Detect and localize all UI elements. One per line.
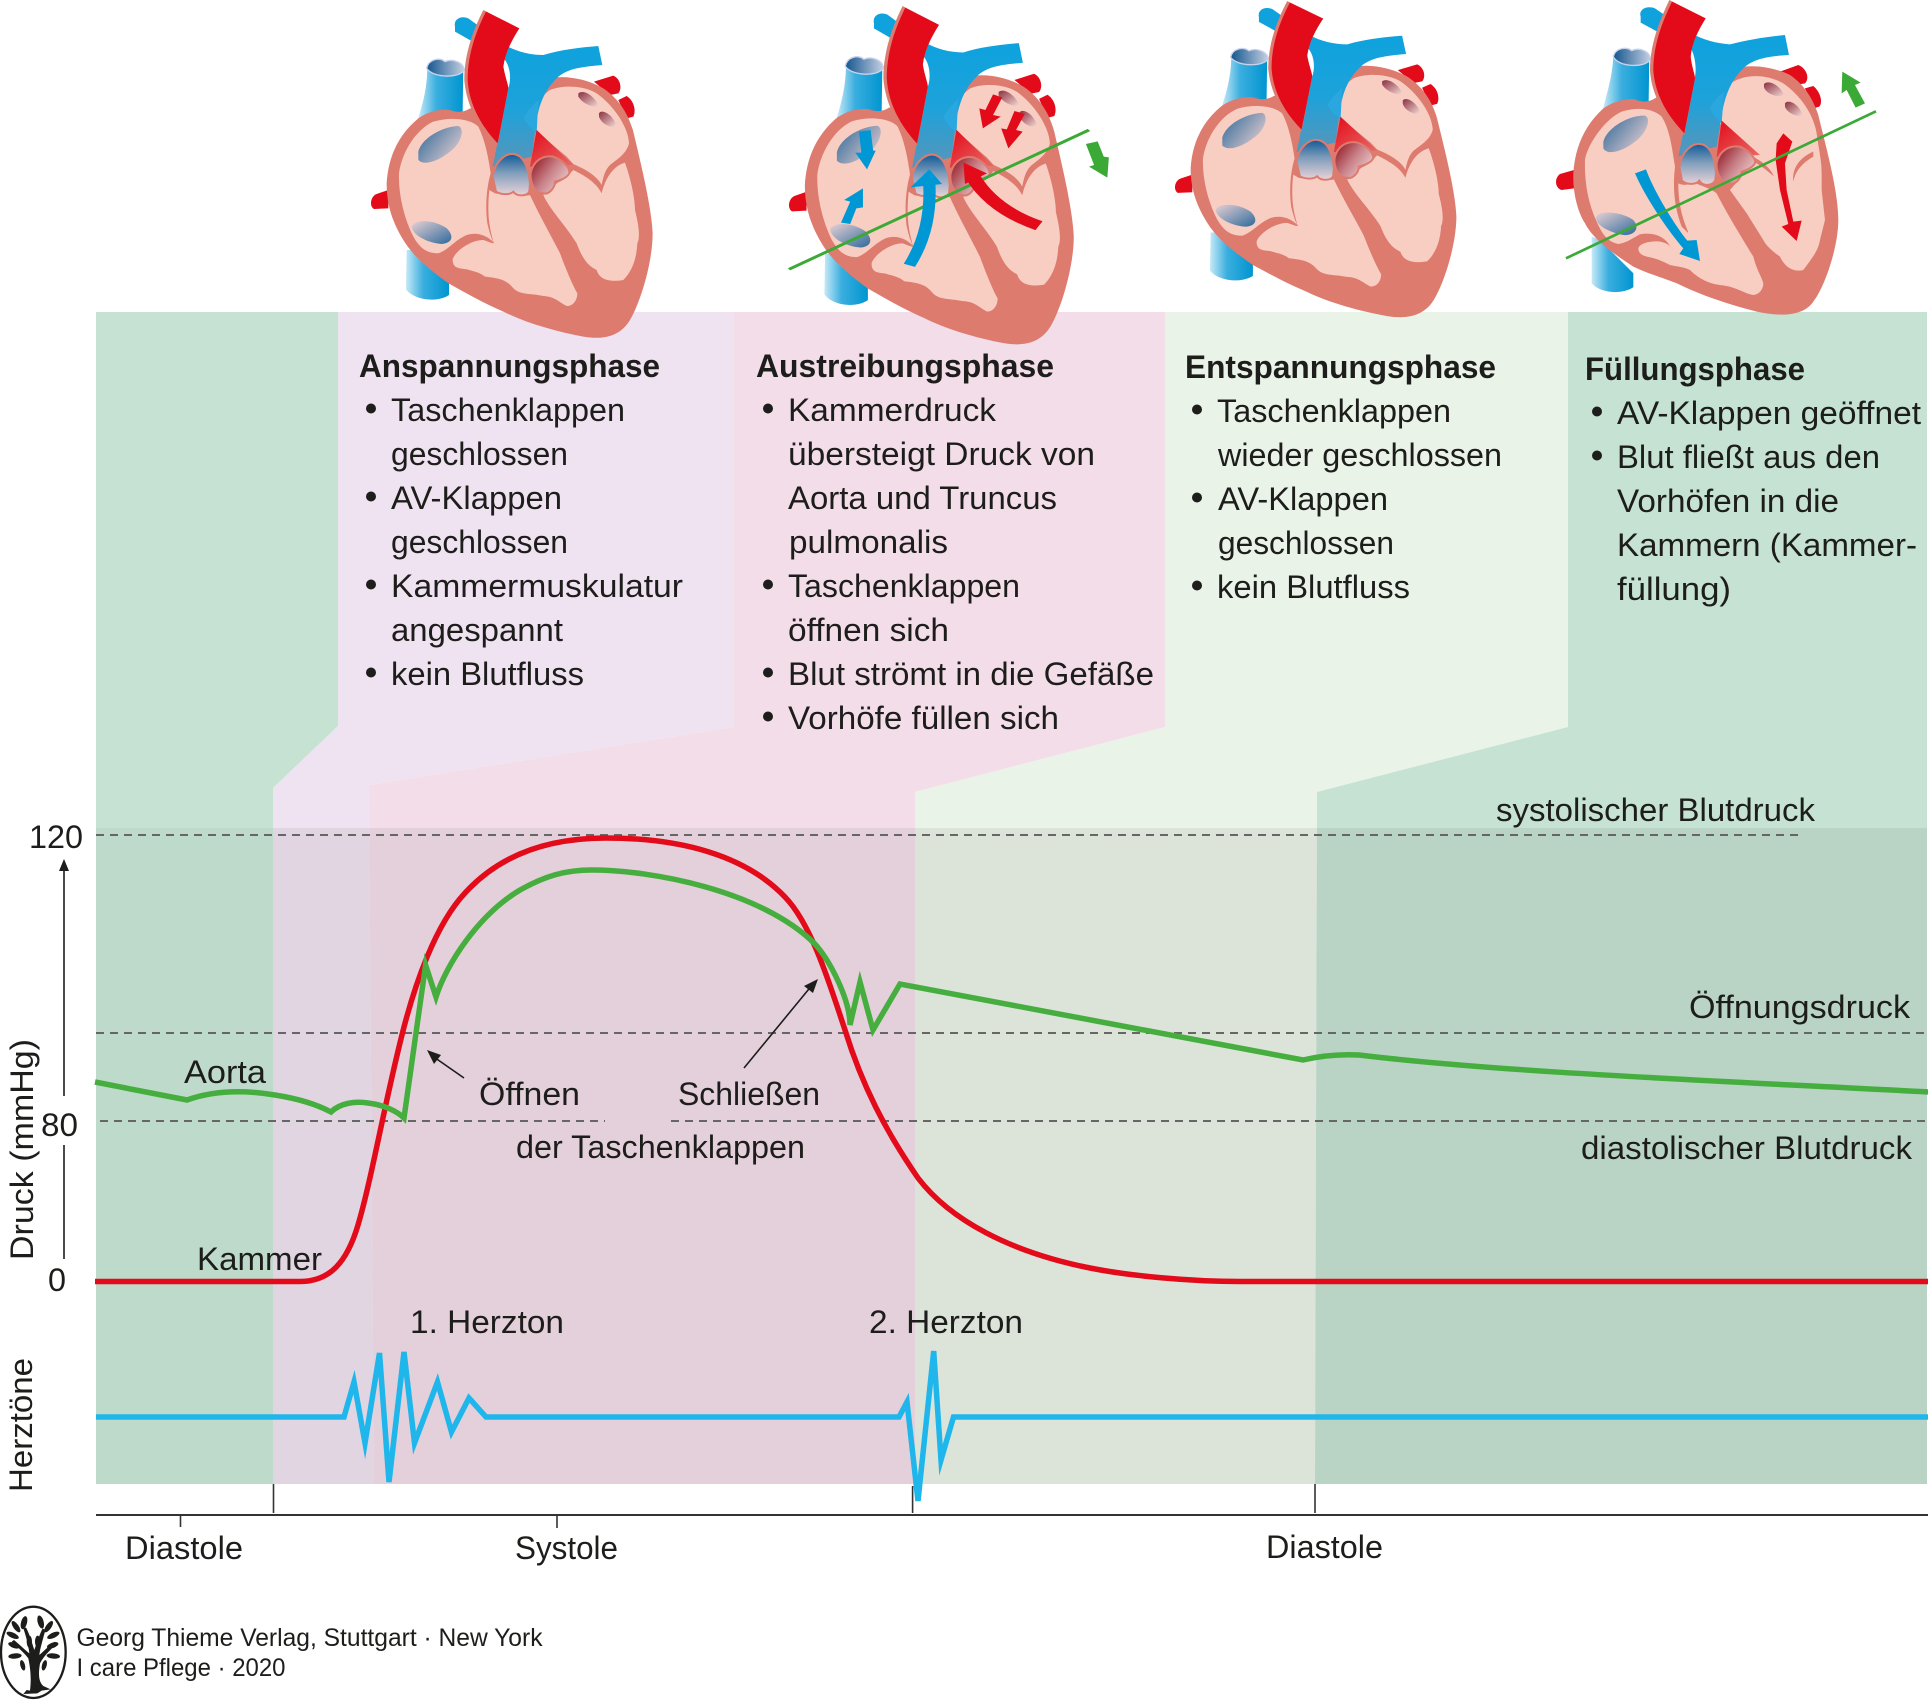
chart: Kammer pressure curve: [95, 838, 1928, 1282]
text block: Entspannungsphase: Entspannungsphase: [1185, 349, 1496, 385]
text block: Austreibungsphase: öffnen sich: [788, 612, 949, 648]
text block: Füllungsphase: Blut fließt aus den: [1617, 439, 1880, 475]
text block: Austreibungsphase: übersteigt Druck von: [788, 436, 1095, 472]
chart: Aorta pressure curve: [95, 870, 1928, 1118]
text block: Füllungsphase: Kammern (Kammer-: [1617, 527, 1917, 563]
text block: Entspannungsphase: wieder geschlossen: [1217, 437, 1502, 473]
label: axis numbers: 120: [29, 819, 83, 855]
label: der Taschenklappen: der Taschenklappen: [516, 1129, 805, 1165]
arrow: Öffnen pointer: [427, 1050, 464, 1078]
label: Druck (mmHg): Druck (mmHg): [4, 1039, 40, 1260]
text block: Anspannungsphase: [359, 348, 683, 692]
label: Diastole right: Diastole: [1266, 1529, 1383, 1565]
text block: Füllungsphase: Vorhöfen in die: [1617, 483, 1839, 519]
icon: heart Anspannungsphase: [371, 10, 653, 338]
label: Öffnungsdruck: Öffnungsdruck: [1689, 989, 1911, 1025]
text block: Anspannungsphase: Kammermuskulatur: [391, 568, 683, 604]
label: systolischer Blutdruck: systolischer Blutdruck: [1496, 792, 1816, 828]
text block: Anspannungsphase: Anspannungsphase: [359, 348, 660, 384]
text block: Austreibungsphase: [756, 348, 1154, 736]
panel: Austreibungsphase background: [369, 312, 1165, 1484]
text block: Füllungsphase: füllung): [1617, 571, 1731, 607]
label: Schließen: Schließen: [678, 1076, 820, 1112]
label: 2. Herzton: 2. Herzton: [869, 1304, 1023, 1340]
icon: heart Austreibungsphase: [789, 6, 1109, 344]
panel: Anspannungsphase background: [273, 312, 734, 1484]
label: axis numbers: 80: [41, 1107, 78, 1143]
text block: Austreibungsphase: Kammerdruck: [788, 392, 997, 428]
text block: Anspannungsphase: AV-Klappen: [391, 480, 562, 516]
arrow: pressure axis: [59, 859, 69, 1259]
text block: Austreibungsphase: Vorhöfe füllen sich: [788, 700, 1059, 736]
panel: chart shading band: [273, 828, 1927, 1484]
text block: publisher credit: Georg Thieme Verlag, Stuttgart · New York: [76, 1624, 543, 1652]
label: axis numbers: 0: [48, 1262, 66, 1298]
text block: Füllungsphase: Füllungsphase: [1585, 351, 1805, 387]
icon: Thieme tree logo: [1, 1607, 66, 1698]
panel: Entspannungsphase background: [915, 312, 1568, 1484]
arrow: Schließen pointer: [744, 979, 818, 1068]
text block: Austreibungsphase: Aorta und Truncus: [788, 480, 1057, 516]
text block: Füllungsphase: AV-Klappen geöffnet: [1617, 395, 1921, 431]
text block: Anspannungsphase: geschlossen: [391, 436, 568, 472]
panel: chart shading band left: [96, 828, 273, 1484]
text block: Anspannungsphase: Taschenklappen: [391, 392, 625, 428]
label: Aorta: Aorta: [184, 1054, 266, 1090]
text block: Anspannungsphase: geschlossen: [391, 524, 568, 560]
label: Öffnen: Öffnen: [479, 1076, 580, 1112]
icon: heart Füllungsphase: [1556, 0, 1876, 315]
text block: Anspannungsphase: angespannt: [391, 612, 563, 648]
icon: heart Entspannungsphase: [1175, 1, 1456, 317]
label: axis numbers: [29, 819, 83, 1298]
text block: Entspannungsphase: geschlossen: [1218, 525, 1394, 561]
text block: Entspannungsphase: [1185, 349, 1502, 605]
text block: Füllungsphase: [1585, 351, 1921, 607]
label: Kammer: Kammer: [197, 1241, 322, 1277]
panel: Diastole background left: [96, 312, 338, 1484]
text block: Entspannungsphase: Taschenklappen: [1217, 393, 1451, 429]
text block: Anspannungsphase: kein Blutfluss: [391, 656, 584, 692]
text block: Austreibungsphase: Taschenklappen: [788, 568, 1020, 604]
label: Herztöne: Herztöne: [3, 1358, 39, 1492]
panel: Füllungsphase background: [1315, 312, 1927, 1484]
text block: Entspannungsphase: kein Blutfluss: [1217, 569, 1410, 605]
chart: time axis: [96, 1484, 1928, 1528]
text block: Austreibungsphase: Austreibungsphase: [756, 348, 1054, 384]
label: 1. Herzton: 1. Herzton: [410, 1304, 564, 1340]
text block: Entspannungsphase: AV-Klappen: [1218, 481, 1388, 517]
chart: Herztöne trace: [96, 1351, 1928, 1501]
text block: Austreibungsphase: Blut strömt in die Gefäße: [788, 656, 1154, 692]
label: Diastole left: Diastole: [125, 1530, 243, 1566]
label: diastolischer Blutdruck: diastolischer Blutdruck: [1581, 1130, 1913, 1166]
text block: publisher credit: I care Pflege · 2020: [76, 1654, 286, 1682]
label: Systole: Systole: [515, 1530, 618, 1566]
text block: Austreibungsphase: pulmonalis: [789, 524, 948, 560]
text block: publisher credit: [76, 1624, 543, 1682]
